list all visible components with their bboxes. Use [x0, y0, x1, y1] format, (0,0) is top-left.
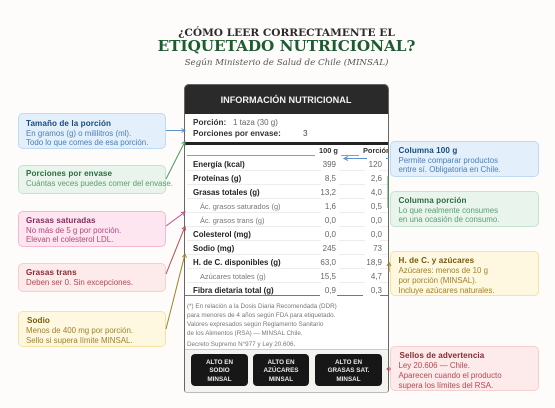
row: energia: [187, 160, 388, 171]
row: grasas totales: 13,2: [320, 188, 336, 197]
callout: columna 100 g: Permite comparar productos: [398, 156, 498, 165]
callout: columna porcion: Columna porción: [398, 196, 467, 205]
callout: grasas saturadas: No más de 5 g por porción.: [26, 226, 121, 235]
row: grasas totales: [187, 188, 388, 199]
seal: grasas: MINSAL: [336, 376, 361, 383]
row: colesterol: Colesterol (mg): [193, 230, 251, 239]
row: fibra: [185, 286, 388, 296]
arrow: sodio: [166, 254, 186, 329]
serving info: [193, 118, 308, 138]
arrow: sellos: [387, 367, 391, 371]
callout: grasas trans: [18, 263, 166, 292]
row: saturados: Ác. grasos saturados (g): [200, 202, 281, 211]
callout: tamano: Tamaño de la porción: [26, 119, 111, 128]
serving info: 1 taza (30 g): [233, 118, 278, 127]
seal: azucares: [253, 354, 309, 386]
callout: grasas trans: Deben ser 0. Sin excepciones.: [26, 278, 133, 287]
row: sodio: Sodio (mg): [193, 244, 234, 253]
row: trans: 0,0: [325, 216, 336, 225]
row: azucares: 15,5: [320, 272, 336, 281]
callout: porciones: Porciones por envase: [26, 169, 112, 178]
row: proteinas: Proteínas (g): [193, 174, 241, 183]
row: trans: [187, 216, 388, 227]
callout: sellos: Ley 20.606 — Chile.: [398, 361, 470, 370]
panel: nutrition label: [184, 84, 388, 393]
callout: tamano: [18, 113, 166, 149]
callout: grasas saturadas: [18, 211, 166, 247]
row: azucares: [187, 272, 388, 283]
callout: sodio: [18, 311, 166, 347]
title line 1: ¿CÓMO LEER CORRECTAMENTE EL: [178, 27, 395, 39]
callout: hidratos y azucares: por porción (MINSAL).: [398, 276, 477, 285]
seal: grasas: [315, 354, 382, 386]
footnote: de los Alimentos (RSA) — MINSAL Chile.: [187, 330, 303, 336]
table column headers: [187, 146, 388, 156]
label header: INFORMACIÓN NUTRICIONAL: [221, 95, 351, 105]
seal: grasas: ALTO EN: [335, 359, 362, 366]
seal: sodio: ALTO EN: [206, 359, 233, 366]
row: saturados: 1,6: [325, 202, 336, 211]
row: proteinas: 8,5: [325, 174, 336, 183]
callout: sellos: Sellos de advertencia: [400, 351, 484, 360]
callout: sodio: Sello si supera límite MINSAL.: [26, 336, 133, 345]
serving info: 3: [303, 129, 308, 138]
seal: azucares: MINSAL: [269, 376, 293, 383]
footnote: Valores expresados según Reglamento Sanitario: [187, 321, 323, 328]
row: azucares: Azúcares totales (g): [200, 272, 266, 281]
panel frame: [184, 84, 388, 393]
callout: columna porcion: en una ocasión de consumo.: [398, 215, 499, 224]
row: fibra: 0,9: [325, 286, 336, 295]
callout: sellos: [390, 346, 538, 391]
seal: sodio: MINSAL: [207, 376, 232, 383]
row: saturados: 0,5: [371, 202, 382, 211]
callout: columna 100 g: [390, 141, 538, 177]
row: energia: 399: [323, 160, 336, 169]
footnote: (*) En relación a la Dosis Diaria Recomendada (DDR): [187, 303, 337, 310]
arrow: porciones: [166, 142, 185, 179]
row: energia: Energía (kcal): [193, 160, 245, 169]
row: hidratos: 63,0: [320, 258, 336, 267]
callout: porciones: Cuántas veces puedes comer del envase.: [26, 179, 173, 188]
subtitle: Según Ministerio de Salud de Chile (MINSAL): [185, 58, 388, 68]
seal: grasas: GRASAS SAT.: [328, 367, 369, 374]
callout: grasas saturadas: Elevan el colesterol LDL.: [26, 235, 113, 244]
row: energia: 120: [369, 160, 382, 169]
footnote: Decreto Supremo N°977 y Ley 20.606.: [187, 340, 295, 348]
arrow: saturadas: [166, 212, 185, 226]
table column headers: 100 g: [319, 146, 338, 155]
callout: sodio: Sodio: [27, 316, 50, 325]
row: azucares: 4,7: [371, 272, 382, 281]
row: grasas totales: Grasas totales (g): [193, 188, 260, 197]
callout: columna porcion: [390, 191, 538, 227]
table rows: [185, 160, 388, 296]
callout: tamano: En gramos (g) o mililitros (ml).: [26, 129, 131, 138]
serving info: Porción:: [193, 118, 226, 127]
seal: azucares: AZÚCARES: [264, 367, 298, 374]
row: proteinas: 2,6: [371, 174, 382, 183]
row: trans: 0,0: [371, 216, 382, 225]
row: hidratos: H. de C. disponibles (g): [193, 258, 281, 267]
callout: columna 100 g: Columna 100 g: [398, 146, 457, 155]
callout: columna 100 g: entre sí. Obligatoria en Chile.: [398, 165, 501, 174]
callout: sellos: supera los límites del RSA.: [398, 381, 493, 390]
row: trans: Ác. grasos trans (g): [200, 216, 264, 225]
title: [158, 26, 415, 68]
row: hidratos: [187, 258, 388, 269]
callout: grasas saturadas: Grasas saturadas: [26, 216, 96, 225]
seal: sodio: [191, 354, 248, 386]
callout: tamano: Todo lo que comes de esa porción.: [26, 138, 148, 147]
seal: sodio: SODIO: [209, 367, 230, 374]
footnote: para menores de 4 años según FDA para etiquetado.: [187, 312, 335, 319]
row: sodio: 245: [323, 244, 336, 253]
row: colesterol: 0,0: [325, 230, 336, 239]
callout: sodio: Menos de 400 mg por porción.: [26, 326, 133, 335]
serving info: Porciones por envase:: [193, 129, 281, 138]
row: fibra: Fibra dietaria total (g): [193, 286, 274, 295]
label header: [184, 84, 388, 114]
arrow: hidratos: [387, 262, 391, 272]
arrow: columna porcion: [387, 176, 389, 208]
callout: columna porcion: Lo que realmente consumes: [398, 206, 498, 215]
callout: sellos: Aparecen cuando el producto: [398, 371, 502, 380]
row: colesterol: [187, 230, 388, 241]
row: sodio: 73: [373, 244, 382, 253]
callout: hidratos y azucares: [390, 251, 538, 296]
row: grasas totales: 4,0: [371, 188, 382, 197]
arrow: tamano: [166, 128, 185, 132]
callout: grasas trans: Grasas trans: [26, 268, 77, 277]
callout: hidratos y azucares: Incluye azúcares naturales.: [398, 286, 495, 295]
callout: hidratos y azucares: H. de C. y azúcares: [398, 256, 474, 265]
row: colesterol: 0,0: [371, 230, 382, 239]
row: hidratos: 18,9: [366, 258, 382, 267]
title line 2: ETIQUETADO NUTRICIONAL?: [158, 37, 415, 55]
arrow: columna 100 g: [344, 156, 389, 160]
callout: hidratos y azucares: Azúcares: menos de 10 g: [398, 266, 488, 275]
row: fibra: 0,3: [371, 286, 382, 295]
arrow: trans: [166, 226, 186, 274]
seals background: [184, 349, 389, 393]
row: sodio: [187, 244, 388, 255]
row: saturados: [187, 202, 388, 213]
footnote: [187, 303, 337, 348]
callout: porciones: [18, 165, 166, 194]
seal: azucares: ALTO EN: [267, 359, 295, 366]
row: proteinas: [187, 174, 388, 185]
